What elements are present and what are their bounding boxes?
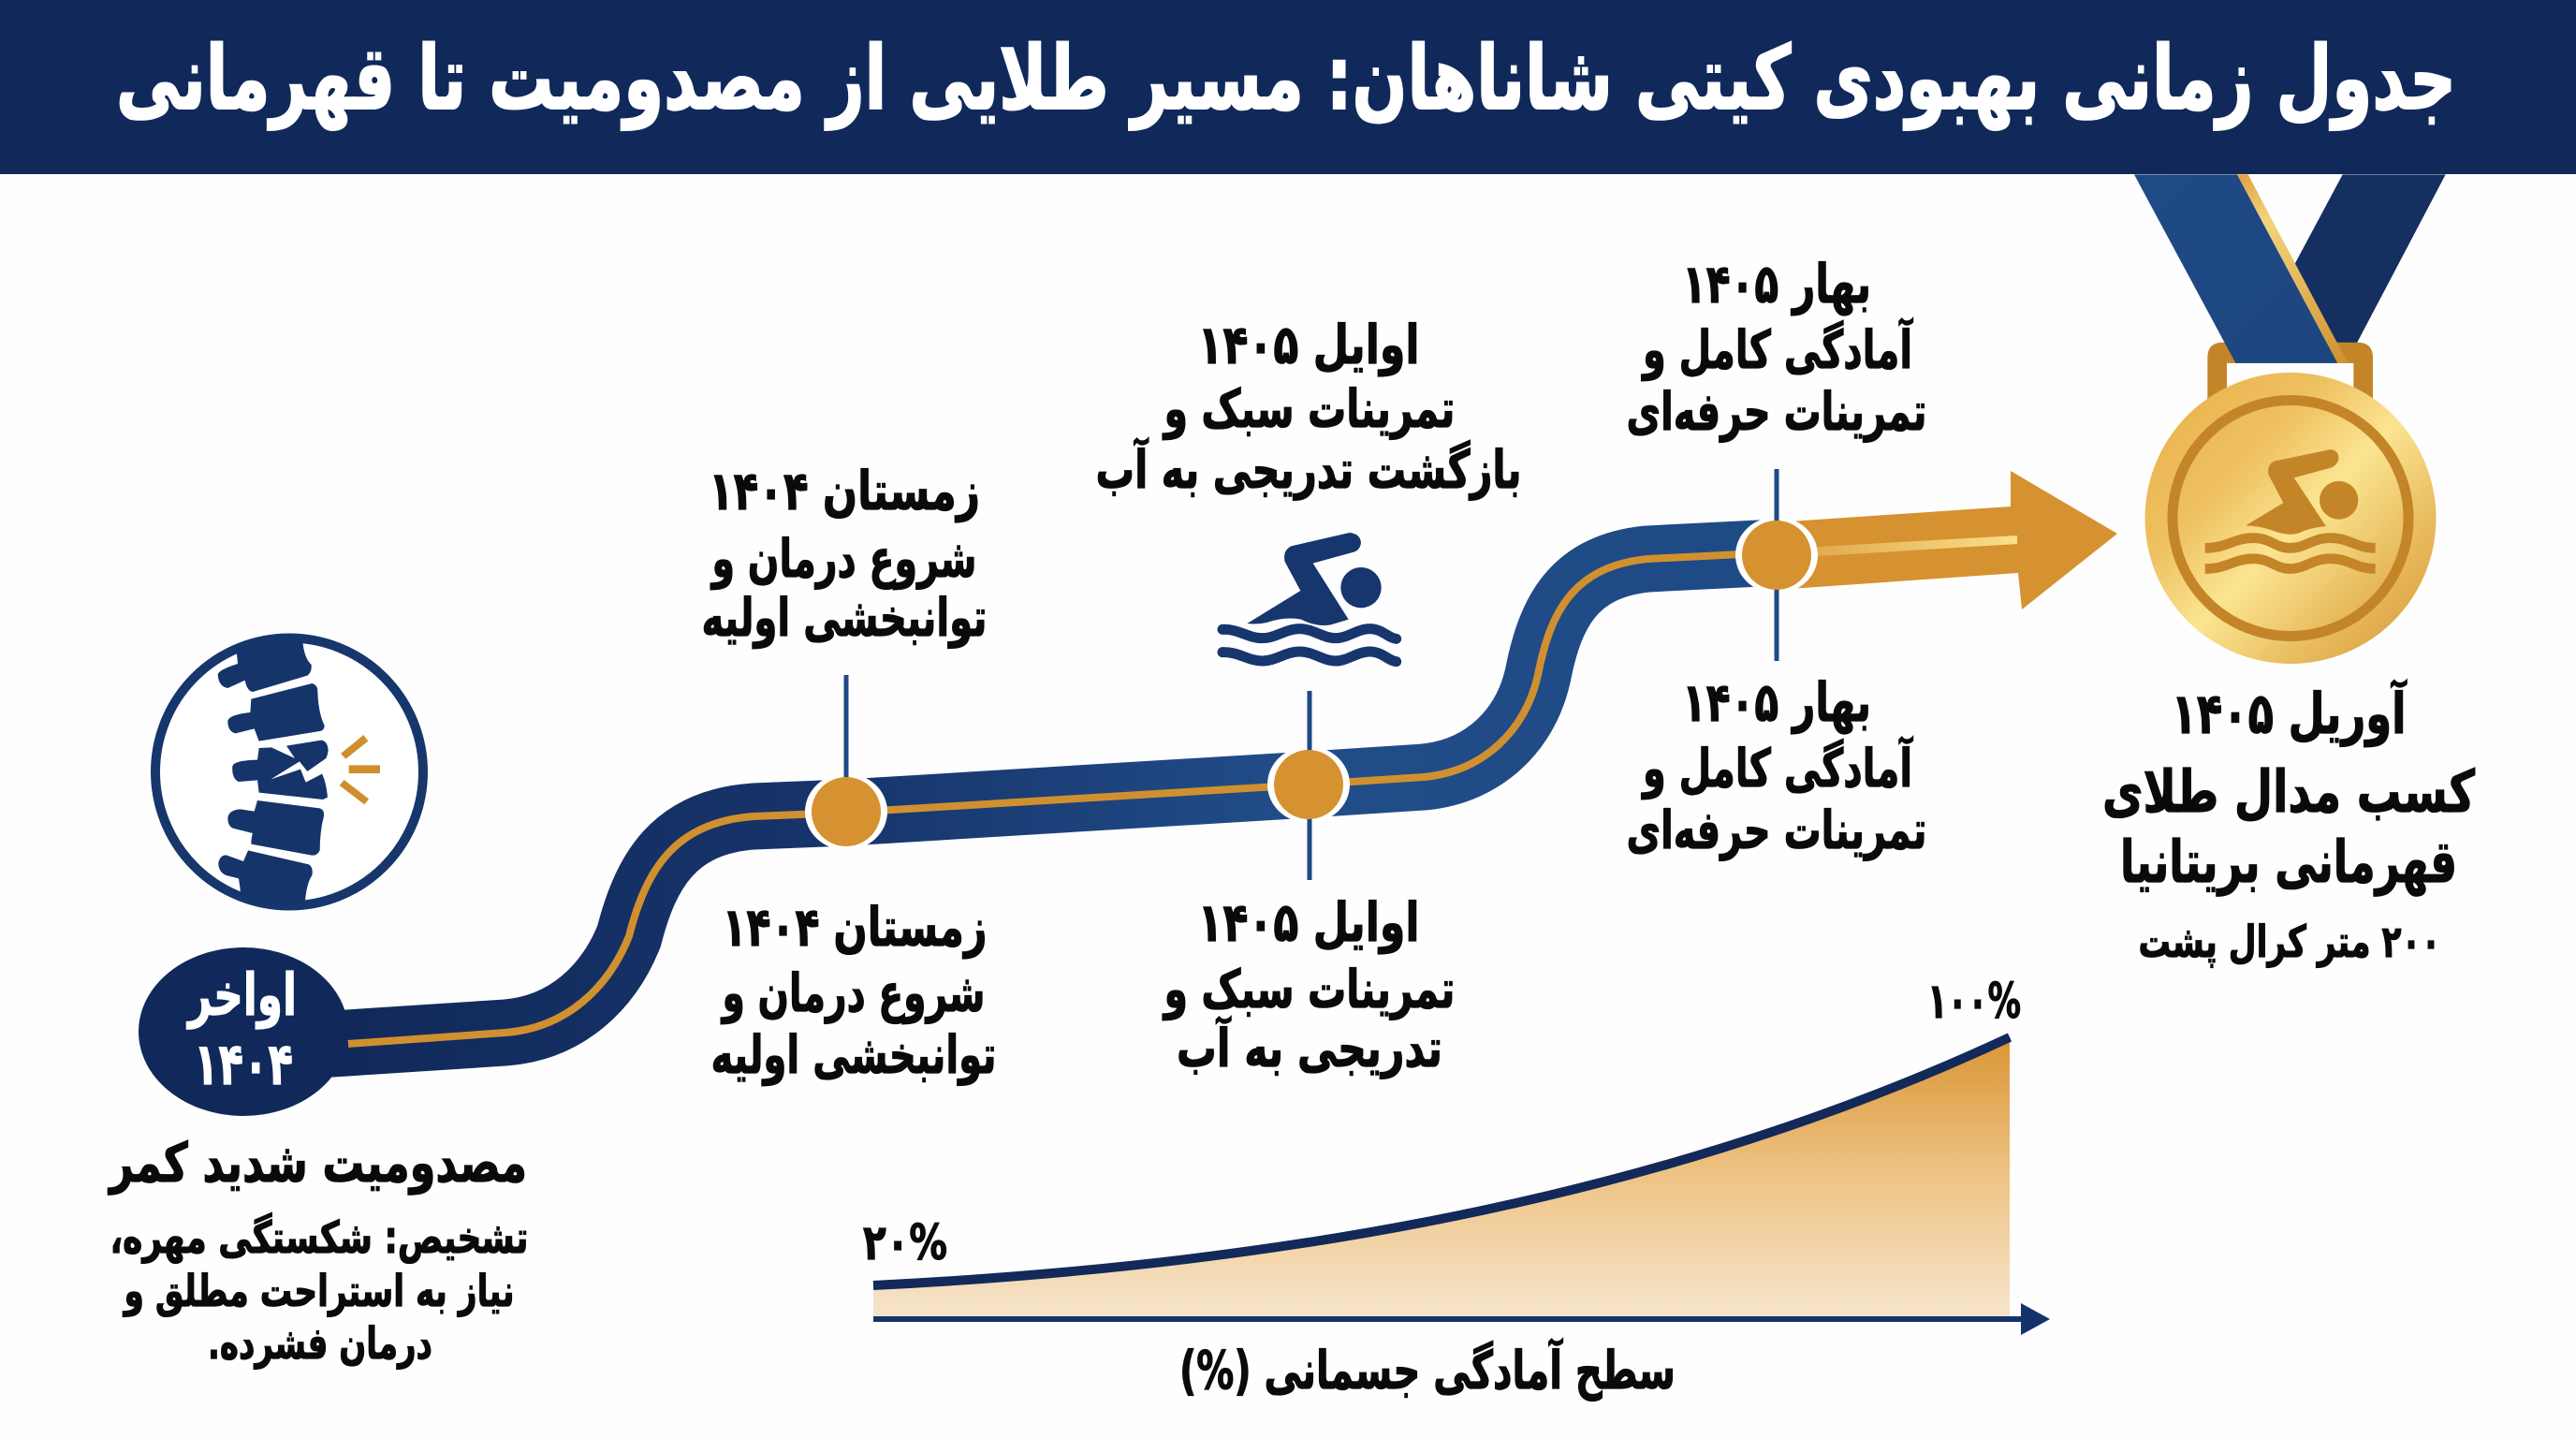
badge text: اواخر [186,961,297,1029]
medal caption: ۲۰۰ متر کرال پشت [2138,917,2441,968]
label: winter 1404 below [711,897,996,1086]
chart end value: ۱۰۰% [1927,974,2021,1030]
icon: fractured spine in circle [155,638,423,906]
label: spring 1405 above: تمرینات حرفه‌ای [1627,382,1926,443]
start caption: injury: درمان فشرده. [208,1318,432,1370]
start caption: injury: مصدومیت شدید کمر [108,1131,527,1196]
label: winter 1404 below: زمستان ۱۴۰۴ [723,897,987,959]
medal caption: کسب مدال طلای [2102,757,2476,826]
medal caption [2102,679,2476,968]
label: winter 1404 above: زمستان ۱۴۰۴ [709,461,980,522]
label: winter 1404 below: توانبخشی اولیه [711,1025,996,1086]
label: early 1405 above: تمرینات سبک و [1162,379,1455,440]
label: winter 1404 above: شروع درمان و [710,529,977,590]
start badge: ۱۴۰۴ [194,1030,293,1098]
label: early 1405 below [1162,892,1455,1079]
start caption: injury: تشخیص: شکستگی مهره، [110,1212,528,1264]
node 3 connector and marker [1735,469,1818,661]
label: early 1405 above: اوایل ۱۴۰۵ [1198,315,1419,376]
label: early 1405 below: اوایل ۱۴۰۵ [1198,892,1419,954]
icon: swimmer [1222,533,1397,662]
label: winter 1404 above: توانبخشی اولیه [702,588,987,649]
chart axis title: سطح آمادگی جسمانی (%) [1179,1338,1676,1401]
medal caption: قهرمانی بریتانیا [2120,828,2457,896]
label: spring 1405 below: تمرینات حرفه‌ای [1627,800,1926,861]
label: spring 1405 below: بهار ۱۴۰۵ [1682,672,1871,734]
icon: gold medal with ribbon [2134,174,2446,664]
label: spring 1405 below: آمادگی کامل و [1641,736,1913,800]
node 2 connector and marker [1267,691,1350,880]
x axis arrow [873,1303,2050,1335]
label: early 1405 below: تدریجی به آب [1177,1016,1442,1079]
label: winter 1404 above [702,461,987,649]
chart: fitness level area curve [863,974,2050,1401]
label: early 1405 above: بازگشت تدریجی به آب [1095,437,1522,501]
timeline ribbon path [318,552,1778,1045]
label: spring 1405 above: بهار ۱۴۰۵ [1682,254,1871,315]
label: early 1405 above [1095,315,1522,501]
label: spring 1405 above: آمادگی کامل و [1641,317,1913,381]
label: spring 1405 below [1627,672,1926,861]
label: spring 1405 above [1627,254,1926,443]
medal caption: آوریل ۱۴۰۵ [2172,679,2408,747]
chart start value: ۲۰% [863,1215,947,1271]
start caption: injury: نیاز به استراحت مطلق و [123,1266,515,1317]
start caption: injury [108,1131,528,1370]
start badge [139,947,348,1116]
header banner [0,0,2576,174]
label: early 1405 below: تمرینات سبک و [1162,960,1455,1020]
arrow to medal [1790,471,2117,609]
node 1 connector and marker [805,675,887,850]
label: winter 1404 below: شروع درمان و [720,963,985,1024]
